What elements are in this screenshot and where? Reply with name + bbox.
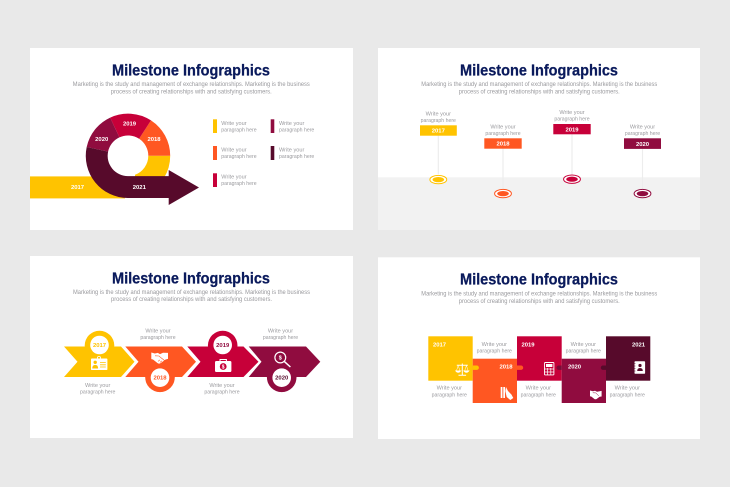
description text — [421, 290, 657, 305]
chevron 2019: paragraph here — [204, 390, 240, 396]
square 2021: 2021 — [632, 342, 646, 348]
chart: donut with arrow: 2020 — [95, 137, 109, 143]
chevron 2019: 2019 — [216, 343, 230, 349]
description text — [73, 289, 310, 303]
chart: donut with arrow — [30, 114, 199, 205]
icon: briefcase: $ — [222, 364, 225, 370]
legend: Write your — [279, 148, 304, 154]
milestone 2017: paragraph here — [421, 118, 456, 124]
legend: Write your — [221, 174, 247, 180]
milestone 2017: 2017 — [432, 129, 446, 135]
square 2020: 2020 — [568, 365, 582, 371]
milestone 2019: 2019 — [565, 127, 579, 133]
legend: paragraph here — [279, 154, 314, 160]
icon: id card — [91, 356, 107, 370]
icon: contact book — [634, 361, 645, 374]
square 2020: Write your — [571, 342, 596, 348]
description text: Marketing is the study and management of exchange relationships. Marketing is the business — [421, 81, 657, 88]
square 2017 — [428, 336, 473, 398]
description text: Marketing is the study and management of exchange relationships. Marketing is the business — [73, 289, 310, 296]
icon: handshake — [151, 352, 168, 364]
chart: donut with arrow: 2018 — [147, 137, 161, 143]
description text: Marketing is the study and management of exchange relationships. Marketing is the business — [73, 81, 310, 88]
legend: Write your — [221, 148, 247, 154]
square 2018: paragraph here — [477, 349, 512, 355]
description text — [421, 81, 657, 96]
legend: paragraph here — [221, 128, 257, 134]
icon: calculator — [544, 362, 554, 375]
milestone 2018: Write your — [490, 124, 516, 130]
square 2019: 2019 — [521, 342, 535, 348]
description text: process of creating relationships with and satisfying customers. — [459, 89, 620, 96]
chevron 2017: Write your — [85, 383, 110, 389]
chevron 2020: Write your — [268, 328, 293, 334]
heading: Milestone Infographics — [460, 62, 618, 79]
milestone 2019 — [553, 110, 591, 183]
icon: handshake — [590, 390, 602, 399]
heading: Milestone Infographics — [112, 270, 270, 287]
square 2017: Write your — [437, 386, 462, 392]
icon: scales — [456, 364, 469, 375]
panel: chevron process — [30, 256, 353, 438]
legend: paragraph here — [221, 181, 257, 187]
chevron 2017 — [64, 331, 134, 396]
square 2021: paragraph here — [610, 392, 645, 398]
heading: Milestone Infographics — [460, 272, 618, 289]
legend: Write your — [221, 121, 247, 127]
milestone 2017 — [420, 112, 457, 184]
chart: donut with arrow: 2019 — [123, 122, 137, 128]
legend: paragraph here — [221, 154, 257, 160]
milestone 2018: paragraph here — [485, 131, 521, 137]
milestone 2020: Write your — [630, 124, 655, 130]
square 2021: Write your — [615, 386, 640, 392]
square 2019: paragraph here — [521, 392, 556, 398]
description text: process of creating relationships with and satisfying customers. — [459, 298, 620, 305]
legend: Write your — [279, 121, 304, 127]
square 2020 — [556, 342, 606, 403]
legend — [213, 119, 314, 187]
chevron 2017: 2017 — [93, 343, 107, 349]
chevron 2020 — [249, 328, 320, 392]
milestone 2020: paragraph here — [625, 131, 660, 137]
panel: pin timeline — [378, 48, 700, 230]
milestone 2019: Write your — [559, 110, 585, 116]
square 2021 — [601, 336, 650, 398]
milestone 2017: Write your — [426, 112, 451, 118]
chevron 2018: Write your — [145, 328, 171, 334]
milestone 2020 — [624, 124, 661, 198]
square 2018: 2018 — [499, 365, 513, 371]
description text: process of creating relationships with and satisfying customers. — [111, 89, 272, 96]
square 2020: paragraph here — [566, 349, 601, 355]
chevron 2018 — [125, 328, 196, 392]
chevron 2019: Write your — [209, 383, 235, 389]
chevron 2018: paragraph here — [140, 335, 176, 341]
milestone 2018 — [484, 124, 522, 198]
square 2018: Write your — [482, 342, 507, 348]
milestone 2019: paragraph here — [554, 116, 590, 122]
chevron 2019 — [187, 331, 258, 396]
description text: process of creating relationships with and satisfying customers. — [111, 296, 272, 303]
square 2017: paragraph here — [432, 392, 467, 398]
description text — [73, 81, 310, 96]
chevron 2017: paragraph here — [80, 390, 115, 396]
square 2019 — [517, 336, 562, 398]
square 2017: 2017 — [433, 342, 447, 348]
chevron 2020: 2020 — [275, 376, 289, 382]
milestone 2020: 2020 — [636, 142, 650, 148]
chart: donut with arrow: 2021 — [133, 185, 147, 191]
description text: Marketing is the study and management of exchange relationships. Marketing is the business — [421, 290, 657, 297]
square 2018 — [473, 342, 517, 403]
icon: tools and hand — [501, 387, 513, 400]
square 2019: Write your — [526, 386, 551, 392]
legend: paragraph here — [279, 128, 314, 134]
chevron 2020: paragraph here — [263, 335, 298, 341]
milestone 2018: 2018 — [496, 142, 510, 148]
chevron 2018: 2018 — [153, 376, 167, 382]
heading: Milestone Infographics — [112, 62, 270, 79]
panel: donut arrow milestone — [30, 48, 353, 230]
panel: staggered squares — [378, 257, 700, 439]
icon: magnifier: $ — [279, 356, 282, 362]
chart: donut with arrow: 2017 — [71, 185, 85, 191]
